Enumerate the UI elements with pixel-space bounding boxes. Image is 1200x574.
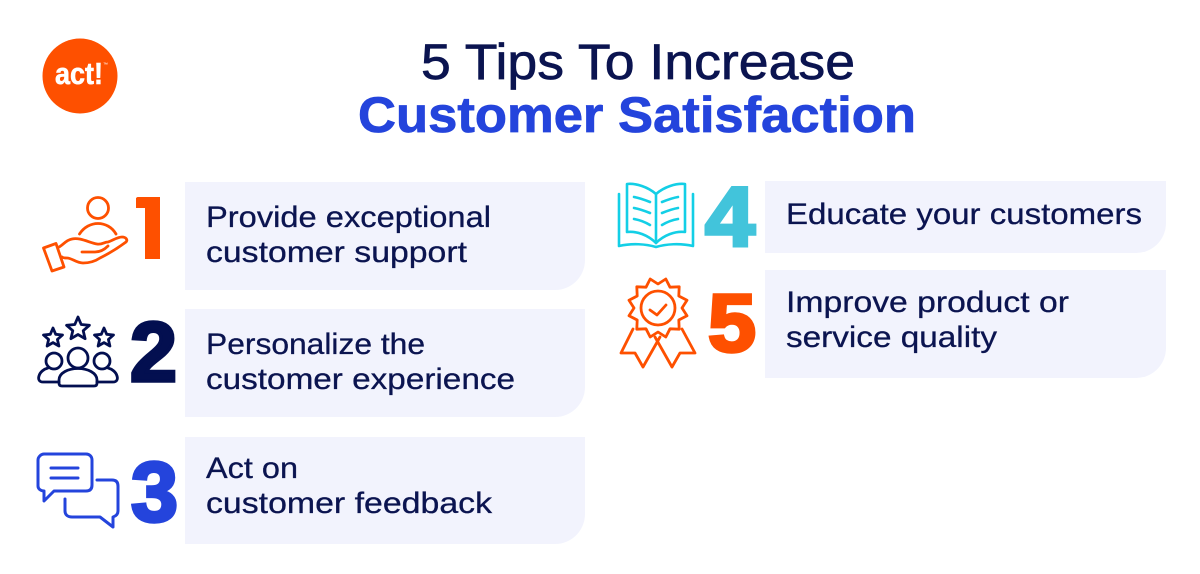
text 2: Personalize the xyxy=(206,328,425,361)
tip 2 xyxy=(39,305,585,417)
text 2: customer experience xyxy=(206,363,515,396)
icon: hand holding person xyxy=(44,198,127,271)
icon: group with stars xyxy=(39,317,117,386)
text 1: Provide exceptional xyxy=(206,201,491,234)
title xyxy=(358,34,916,143)
number 4: 4 xyxy=(705,170,755,264)
text 1 xyxy=(206,201,491,269)
logo: act!: ™ xyxy=(103,62,108,68)
tip 1 xyxy=(44,179,585,290)
panel 5 xyxy=(765,270,1166,378)
number 1: 1 xyxy=(125,179,175,279)
tip 5 xyxy=(621,270,1166,378)
panel 2 xyxy=(185,309,585,417)
title: Customer Satisfaction xyxy=(358,87,916,143)
panel 3 xyxy=(185,437,585,544)
text 3: customer feedback xyxy=(206,487,493,520)
icon: speech bubbles xyxy=(38,454,118,527)
number 2: 2 xyxy=(130,305,177,399)
text 2 xyxy=(206,328,515,396)
number 5: 5 xyxy=(708,278,756,369)
logo: act! xyxy=(42,38,118,114)
text 5 xyxy=(786,286,1069,354)
text 3: Act on xyxy=(206,452,298,485)
text 3 xyxy=(206,452,493,520)
icon: award ribbon xyxy=(621,279,695,367)
panel 1 xyxy=(185,182,585,290)
tip 3 xyxy=(38,437,585,544)
text 4: Educate your customers xyxy=(786,198,1142,231)
title: 5 Tips To Increase xyxy=(421,34,855,90)
number 3: 3 xyxy=(131,445,178,539)
icon: open book xyxy=(619,184,693,247)
text 1: customer support xyxy=(206,236,468,269)
text 5: Improve product or xyxy=(786,286,1069,319)
panel 4 xyxy=(765,181,1166,253)
tip 4 xyxy=(619,170,1166,264)
text 5: service quality xyxy=(786,321,997,354)
logo: act!: act! xyxy=(55,56,103,91)
